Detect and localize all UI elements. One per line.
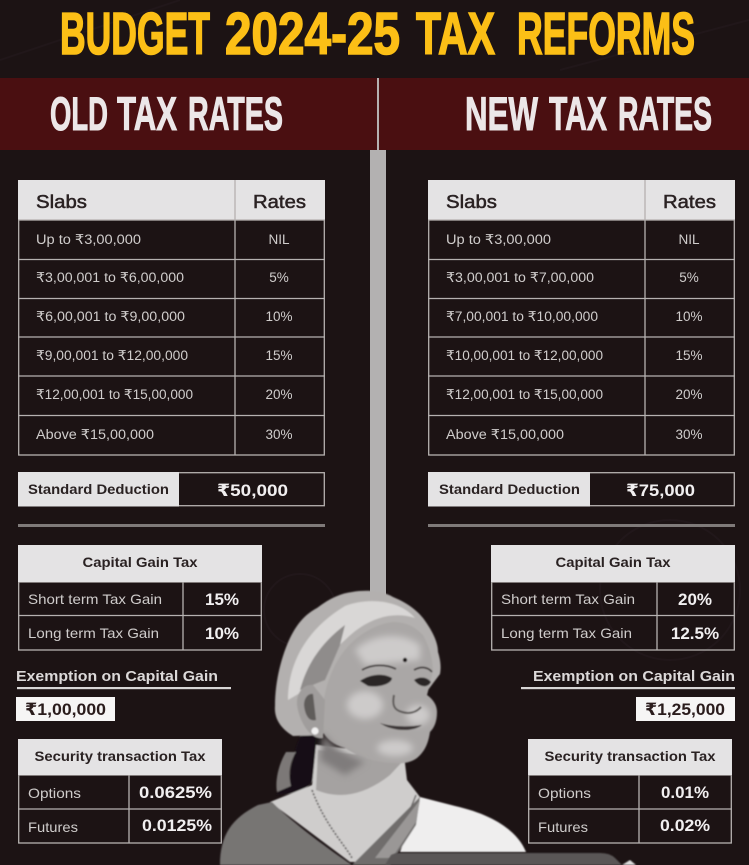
panel: new standard deduction: Standard Deduction: [439, 482, 580, 497]
panel: new security transaction tax: Futures: [538, 819, 588, 835]
panel: new tax table: [428, 180, 735, 455]
panel: new capital gain tax: [491, 545, 735, 650]
center divider bar: [370, 150, 386, 595]
panel: old tax table: ₹9,00,001 to ₹12,00,000: [36, 348, 188, 363]
sari border: [352, 797, 420, 865]
panel: new tax table: ₹10,00,001 to ₹12,00,000: [446, 348, 603, 363]
braid: [276, 732, 322, 795]
jaw shadow: [320, 732, 365, 775]
panel: old tax table: ₹6,00,001 to ₹9,00,000: [36, 309, 185, 324]
panel: old tax table: 10%: [265, 309, 293, 324]
panel: old tax table: 15%: [265, 348, 293, 363]
panel: old tax table: NIL: [268, 232, 290, 247]
title: TAX: [416, 1, 495, 67]
panel: new tax table: ₹3,00,001 to ₹7,00,000: [446, 270, 594, 285]
exemption new: ₹1,25,000: [645, 700, 725, 719]
exemption old: [16, 669, 231, 721]
title: BUDGET: [60, 1, 210, 67]
chest and neck: [270, 745, 420, 862]
nose: [393, 695, 421, 713]
panel: old standard deduction: Standard Deduction: [28, 482, 169, 497]
heading: new tax rates: TAX: [549, 87, 607, 140]
title: 2024-25: [225, 1, 400, 67]
left shoulder sari: [220, 802, 352, 865]
panel: new tax table: ₹7,00,001 to ₹10,00,000: [446, 309, 598, 324]
ear: [297, 685, 325, 738]
panel: old capital gain tax: Long term Tax Gain: [28, 625, 159, 641]
heading: old tax rates: TAX: [117, 87, 177, 140]
panel: new capital gain tax: 12.5%: [671, 624, 719, 643]
panel: new capital gain tax: Capital Gain Tax: [556, 555, 671, 570]
panel: old capital gain tax: 10%: [205, 624, 239, 643]
panel: old capital gain tax: Capital Gain Tax: [82, 555, 198, 570]
necklace: [312, 790, 352, 858]
panel: new security transaction tax: [528, 739, 732, 843]
panel: new security transaction tax: Options: [538, 785, 591, 801]
panel: old security transaction tax: Options: [28, 785, 81, 801]
panel: new tax table: Slabs: [446, 192, 497, 212]
panel: new tax table: Above ₹15,00,000: [446, 427, 564, 442]
panel: old capital gain tax: [18, 545, 262, 650]
panel: old capital gain tax: 15%: [205, 590, 239, 609]
white blouse: [400, 797, 526, 852]
heading: old tax rates: [50, 87, 283, 140]
panel: new standard deduction: ₹75,000: [626, 481, 695, 500]
panel: new tax table: 5%: [679, 270, 699, 285]
mouth: [380, 723, 422, 730]
panel: old capital gain tax: Short term Tax Gain: [28, 591, 162, 607]
heading: old tax rates: OLD: [50, 87, 108, 140]
panel: new tax table: 30%: [675, 427, 703, 442]
exemption old: ₹1,00,000: [25, 700, 106, 719]
panel: old tax table: Above ₹15,00,000: [36, 427, 154, 442]
exemption new: Exemption on Capital Gain: [533, 669, 735, 685]
panel: old tax table: 30%: [265, 427, 293, 442]
panel: new capital gain tax: Short term Tax Gain: [501, 591, 635, 607]
earring: [311, 727, 319, 735]
panel: old tax table: ₹3,00,001 to ₹6,00,000: [36, 270, 184, 285]
panel: old security transaction tax: 0.0125%: [142, 816, 212, 835]
panel: old tax table: 5%: [269, 270, 289, 285]
panel: new tax table: Rates: [663, 192, 716, 212]
panel: old tax table: 20%: [265, 387, 293, 402]
face: [322, 622, 437, 763]
panel: old security transaction tax: 0.0625%: [139, 783, 212, 802]
panel: new tax table: 15%: [675, 348, 703, 363]
panel: new tax table: Up to ₹3,00,000: [446, 232, 551, 247]
exemption old: Exemption on Capital Gain: [16, 669, 218, 685]
panel: old tax table: ₹12,00,001 to ₹15,00,000: [36, 387, 193, 402]
panel: new security transaction tax: Security transaction Tax: [544, 749, 716, 764]
panel: new capital gain tax: 20%: [678, 590, 712, 609]
hair: [275, 591, 441, 736]
header band: [0, 78, 749, 150]
panel: new tax table: ₹12,00,001 to ₹15,00,000: [446, 387, 603, 402]
panel: old tax table: Rates: [253, 192, 306, 212]
panel: old tax table: Slabs: [36, 192, 87, 212]
portrait: woman in sari: [220, 591, 526, 865]
panel: new security transaction tax: 0.01%: [661, 783, 709, 802]
heading: old tax rates: RATES: [188, 87, 283, 140]
folder held in hands: [385, 853, 622, 865]
panel: old security transaction tax: Futures: [28, 819, 78, 835]
panel: old standard deduction: ₹50,000: [217, 481, 288, 500]
exemption new: [521, 669, 735, 721]
panel: old tax table: Up to ₹3,00,000: [36, 232, 141, 247]
bindi: [403, 658, 407, 662]
forehead and cheek highlights: [347, 636, 430, 756]
panel: old security transaction tax: [18, 739, 222, 843]
eyes and brows: [362, 665, 432, 672]
panel: old tax table: [18, 180, 325, 455]
panel: new capital gain tax: Long term Tax Gain: [501, 625, 632, 641]
panel: new security transaction tax: 0.02%: [660, 816, 710, 835]
panel: new tax table: NIL: [678, 232, 700, 247]
title: [60, 1, 695, 67]
panel: old standard deduction: [18, 472, 324, 506]
panel: new tax table: 20%: [675, 387, 703, 402]
panel: old security transaction tax: Security transaction Tax: [34, 749, 206, 764]
hand fragment: [622, 860, 636, 865]
panel: new tax table: 10%: [675, 309, 703, 324]
heading: new tax rates: [465, 87, 712, 140]
panel: new standard deduction: [428, 472, 734, 506]
heading: new tax rates: NEW: [465, 87, 538, 140]
